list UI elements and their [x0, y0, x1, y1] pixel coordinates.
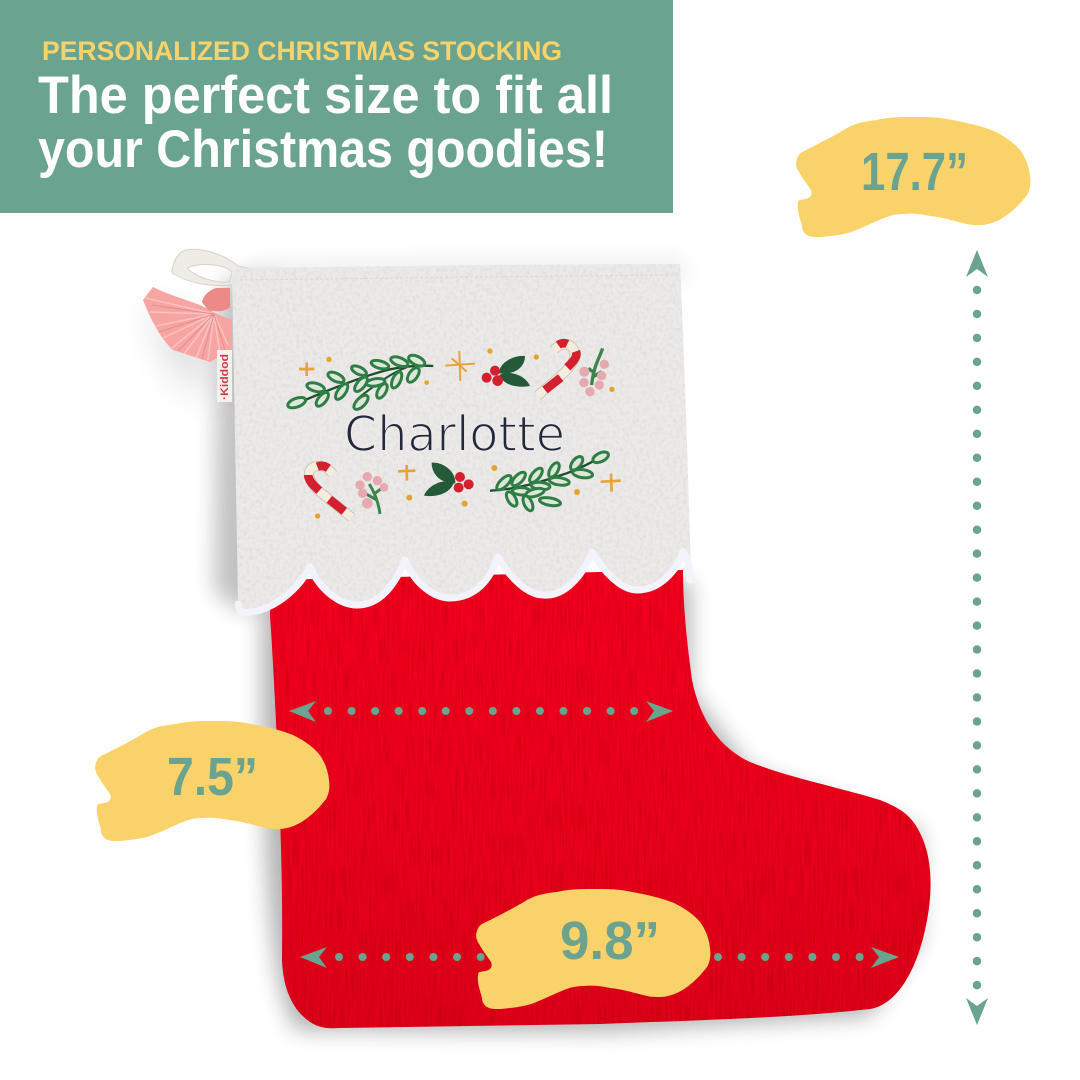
gold beads [315, 348, 615, 519]
title: The perfect size to fit all [38, 66, 613, 125]
embroidery motifs [286, 343, 621, 519]
red stocking body [260, 570, 940, 1040]
bottom candy cane [308, 466, 352, 518]
bottom pink sprig [355, 472, 388, 514]
bottom branch [490, 450, 610, 512]
top holly [482, 356, 530, 387]
header banner [0, 0, 673, 213]
leg width arrow [289, 701, 673, 722]
eyebrow heading: PERSONALIZED CHRISTMAS STOCKING [42, 36, 562, 66]
tassel [143, 287, 232, 362]
stocking photo [143, 249, 940, 1040]
top branch [286, 353, 433, 412]
foot width arrow [300, 947, 899, 968]
cuff top stitching [240, 275, 676, 280]
height measurement arrow [966, 250, 988, 1025]
badge: leg width [95, 721, 329, 841]
badge: foot width: 9.8” [560, 911, 660, 971]
embroidered name: Charlotte [344, 406, 565, 463]
brand tag [217, 350, 232, 402]
badge: height: 17.7” [861, 142, 968, 202]
gold stars [299, 351, 621, 492]
top pink sprig [579, 348, 609, 396]
brand tag: ·Kiddod [219, 354, 231, 400]
title [38, 66, 613, 179]
badge: leg width: 7.5” [167, 747, 258, 807]
badge: height [796, 117, 1030, 237]
white cuff [225, 260, 700, 612]
scalloped hem [238, 552, 690, 612]
bottom holly [424, 463, 474, 496]
title: your Christmas goodies! [38, 120, 608, 179]
hanging loop [172, 249, 258, 286]
top candy cane [537, 343, 576, 396]
badge: foot width [476, 889, 710, 1009]
stocking shadow [150, 258, 920, 1032]
